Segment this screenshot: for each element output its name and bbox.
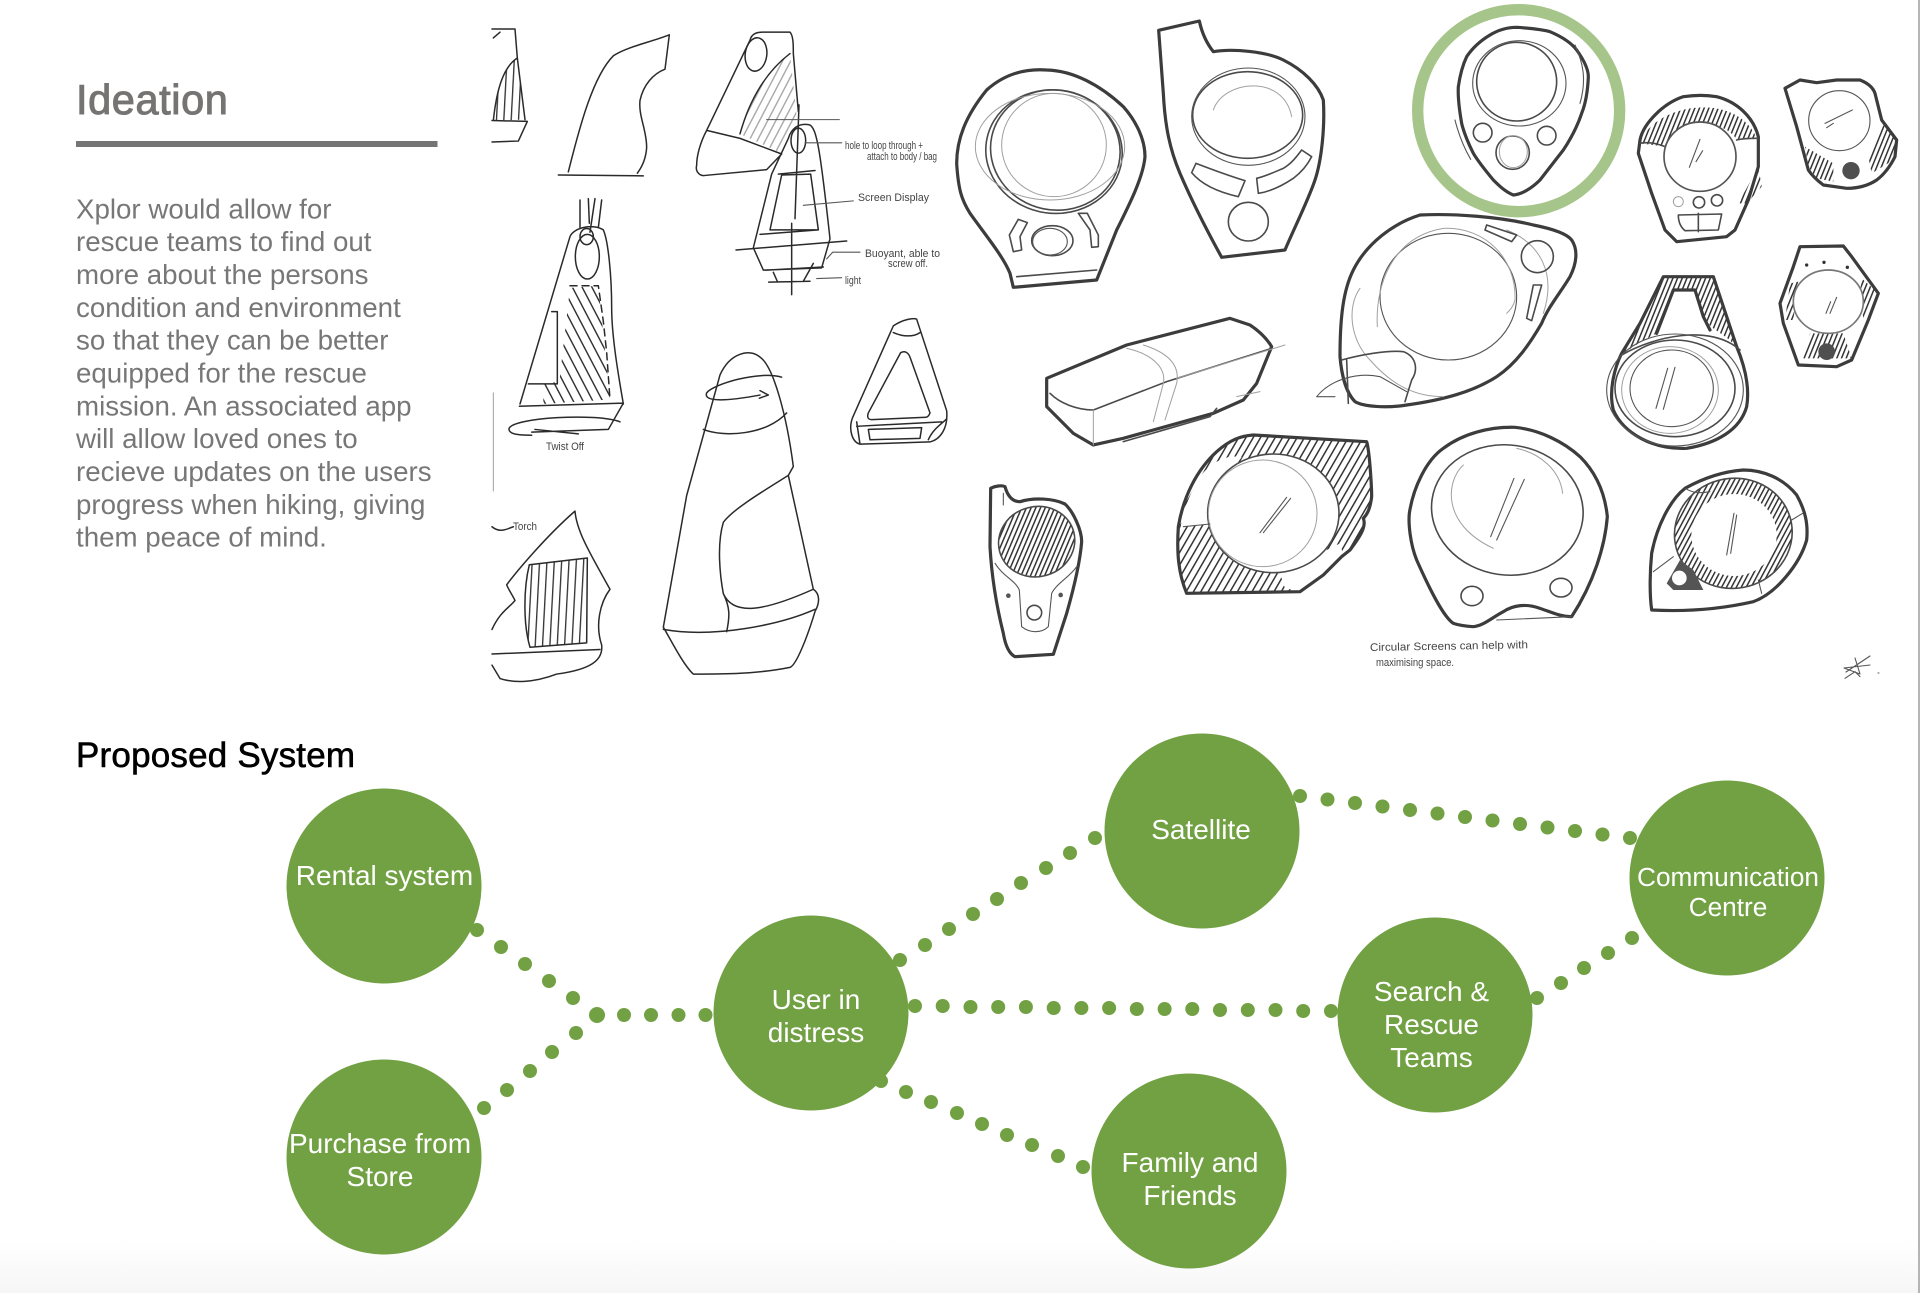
sketch group: lower right devices	[1409, 427, 1860, 678]
annotations on left sketches: screw off.	[888, 258, 928, 270]
node: Family and Friends	[1092, 1074, 1286, 1268]
node: Family and Friends: Family and	[1122, 1147, 1258, 1178]
body paragraph: condition and environment	[76, 292, 401, 323]
annotations on left sketches: Buoyant, able to	[865, 248, 940, 260]
node: User in distress: User in	[772, 984, 860, 1015]
body paragraph: recieve updates on the users	[76, 456, 432, 487]
handwritten note: maximising space.	[1376, 657, 1454, 669]
annotations on left sketches: Screen Display	[858, 192, 929, 204]
sketch: large central device	[1317, 215, 1576, 407]
sketch: hanging device with strap	[509, 199, 623, 435]
sketch: torch device	[492, 511, 610, 681]
node: Purchase from Store: Store	[347, 1161, 413, 1192]
dotted connector: rental to junction	[470, 923, 580, 1005]
node: Rental system	[286, 788, 482, 984]
sketch: small device with hatched sides	[1785, 80, 1897, 188]
signature mark	[1844, 656, 1879, 674]
sketch group: large devices upper left	[957, 21, 1324, 445]
body paragraph: more about the persons	[76, 259, 368, 290]
sketch group: left outlines	[492, 29, 947, 681]
body paragraph: mission. An associated app	[76, 390, 412, 421]
sketch: selected concept	[1418, 10, 1620, 212]
sketch: tilted device with hatch	[696, 32, 798, 176]
node: Family and Friends: Friends	[1143, 1180, 1237, 1211]
handwritten note	[1370, 639, 1528, 669]
highlight ring	[1418, 10, 1620, 212]
margin line	[492, 393, 494, 491]
node: Communication Centre: Communication	[1637, 862, 1819, 892]
annotations on left sketches: attach to body / bag	[867, 151, 937, 163]
dotted connector: junction to user	[589, 1007, 712, 1023]
dotted connector: user to satellite	[893, 831, 1102, 967]
body paragraph: them peace of mind.	[76, 522, 327, 553]
node: Search and Rescue Teams: Rescue	[1384, 1009, 1479, 1040]
body paragraph	[75, 193, 432, 553]
sketch: device with large loop	[1607, 277, 1748, 448]
sketch: rounded device with bracket buttons	[957, 70, 1145, 287]
dotted connector: satellite to communication centre	[1293, 789, 1637, 845]
sketch: device with hatched screen ring	[1650, 469, 1807, 611]
annotations on left sketches: Twist Off	[546, 441, 585, 453]
annotations on left sketches	[513, 140, 940, 533]
sketch: annotated device with screen	[736, 105, 860, 295]
sketch: cut-off device top left	[492, 29, 527, 142]
node: Purchase from Store	[286, 1060, 482, 1254]
sketch: hexagonal watch-like device	[1780, 246, 1878, 367]
body paragraph: so that they can be better	[76, 325, 388, 356]
sketch: hatched rectangular device	[1178, 435, 1372, 593]
node: Communication Centre	[1630, 780, 1824, 976]
body paragraph: equipped for the rescue	[76, 358, 367, 388]
sketch: side view capsule	[1047, 318, 1285, 445]
annotations on left sketches: light	[845, 275, 861, 287]
heading: Proposed System: Proposed System	[76, 736, 355, 775]
selected device outline	[1455, 27, 1588, 195]
node: Satellite: Satellite	[1151, 814, 1251, 845]
sketch group: lower left devices	[990, 435, 1372, 657]
node: Purchase from Store: Purchase from	[289, 1128, 471, 1159]
sketch: triangle device	[851, 319, 947, 444]
chart: proposed system network	[286, 734, 1824, 1268]
node: Satellite	[1104, 734, 1300, 928]
heading underline	[76, 141, 438, 147]
handwritten note: Circular Screens can help with	[1370, 639, 1528, 654]
annotations on left sketches: hole to loop through +	[845, 140, 923, 152]
sketch: device with hatched top	[1638, 95, 1762, 242]
signature scribble	[1845, 672, 1860, 678]
body paragraph: will allow loved ones to	[75, 423, 358, 454]
sketch: side profile	[558, 35, 669, 176]
node: Search and Rescue Teams	[1338, 918, 1532, 1112]
node: User in distress: distress	[768, 1017, 864, 1048]
sketch: large cone device	[663, 353, 819, 674]
sketch: device with lanyard tab	[1159, 21, 1324, 257]
sketch: slim hatched device	[990, 486, 1083, 657]
sketch: large round device with two buttons	[1409, 427, 1607, 627]
dotted connector: user to family	[874, 1074, 1090, 1174]
node: Communication Centre: Centre	[1689, 892, 1767, 922]
node: Rental system: Rental system	[296, 860, 473, 891]
dotted connector: search and rescue to communication centre	[1530, 931, 1639, 1005]
node: Search and Rescue Teams: Search &	[1374, 976, 1489, 1007]
body paragraph: rescue teams to find out	[76, 226, 372, 257]
body paragraph: progress when hiking, giving	[76, 489, 425, 520]
heading: Ideation: Ideation	[76, 76, 228, 123]
dotted connector: user to search and rescue	[908, 999, 1338, 1018]
sketch group: right column devices	[1607, 80, 1897, 448]
node: User in distress	[714, 916, 908, 1110]
panel: concept sketches, pen outlines	[492, 10, 1897, 681]
annotations on left sketches: Torch	[513, 521, 537, 533]
body paragraph: Xplor would allow for	[76, 193, 331, 224]
dotted connector: purchase to junction	[477, 1026, 583, 1115]
panel: ideation text	[75, 76, 438, 553]
node: Search and Rescue Teams: Teams	[1390, 1042, 1473, 1073]
